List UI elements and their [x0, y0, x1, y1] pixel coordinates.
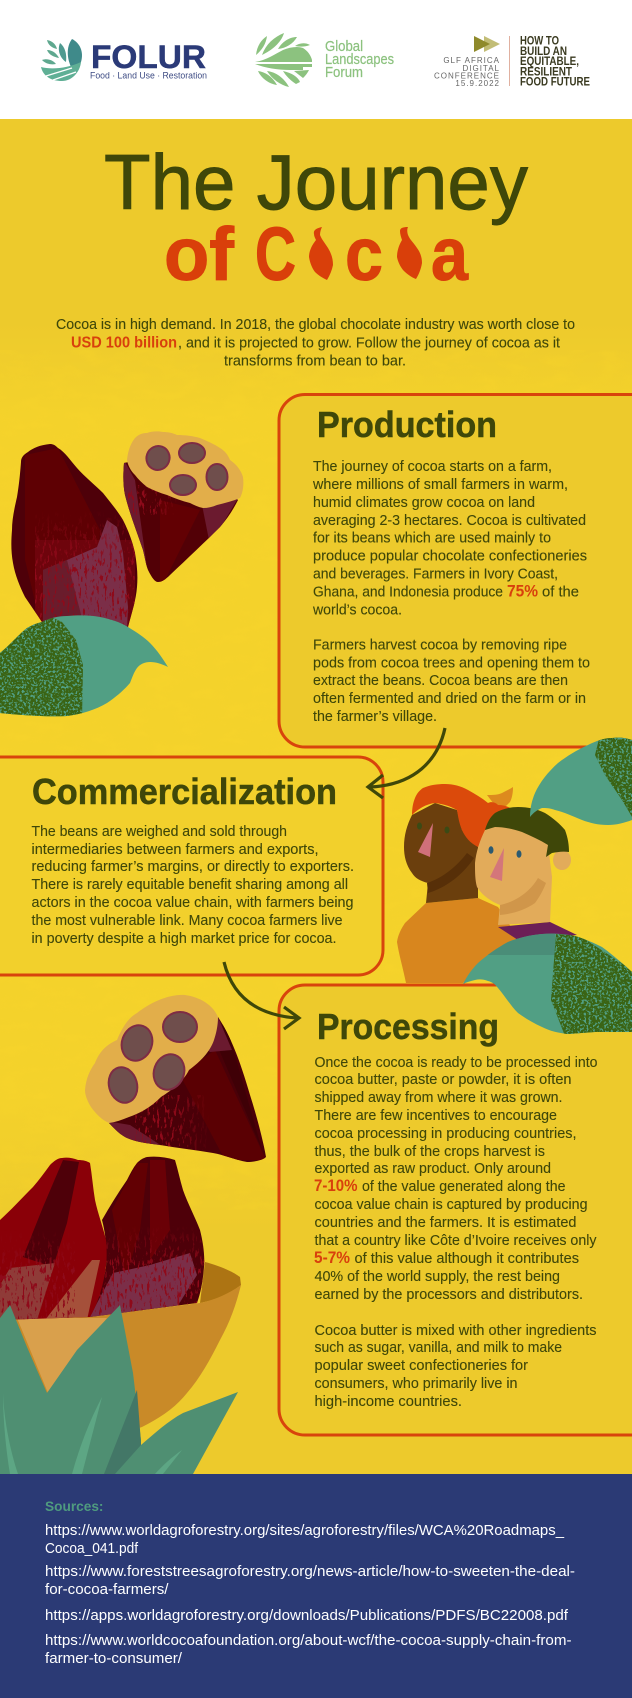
production paragraph 1: The journey of cocoa starts on a farm, — [313, 458, 552, 475]
commercialization text: actors in the cocoa value chain, with farmers being — [32, 894, 354, 911]
panel: production — [279, 394, 632, 747]
illustration: cocoa pods in bowl — [0, 995, 275, 1474]
processing box — [279, 985, 632, 1435]
conference theme: RESILIENT — [520, 66, 572, 78]
processing paragraph 1: cocoa butter, paste or powder, it is often — [314, 1071, 572, 1088]
processing paragraph 1: earned by the processors and distributors. — [314, 1286, 583, 1303]
commercialization text: intermediaries between farmers and exports, — [32, 841, 318, 858]
farmer: woman — [397, 784, 518, 983]
intro text: Cocoa is in high demand. In 2018, the global chocolate industry was worth close to — [56, 316, 575, 333]
production paragraph 1 — [312, 458, 587, 618]
icon: whole cocoa pod — [11, 444, 138, 627]
sources links: for-cocoa-farmers/ — [45, 1581, 169, 1598]
processing paragraph 1: thus, the bulk of the crops harvest is — [314, 1143, 545, 1160]
title line 2 with pod letters — [164, 212, 469, 296]
hair — [485, 807, 569, 857]
sources links: https://apps.worldagroforestry.org/downloads/Publications/PDFS/BC22008.pdf — [45, 1607, 569, 1624]
commercialization text: in poverty despite a high market price for cocoa. — [32, 930, 336, 947]
face and neck — [404, 803, 478, 903]
bowl — [0, 1262, 241, 1474]
icon: green leaf — [0, 615, 168, 716]
processing paragraph 2 — [314, 1322, 596, 1410]
title line 2 with pod letters: a — [431, 212, 469, 296]
processing paragraph 1: that a country like Côte d’Ivoire receives only — [314, 1232, 597, 1249]
conference text: GLF AFRICA — [443, 56, 500, 65]
logo: FOLUR — [41, 39, 207, 81]
intro text — [56, 316, 575, 370]
commercialization text — [32, 823, 354, 947]
plant leaves — [0, 1305, 238, 1474]
shirt — [498, 922, 577, 940]
face and neck — [475, 815, 552, 925]
processing paragraph 2: Cocoa butter is mixed with other ingredients — [314, 1322, 596, 1339]
tagline: Food · Land Use · Restoration — [90, 70, 207, 80]
processing paragraph 1: cocoa value chain is captured by producing — [314, 1196, 588, 1213]
processing paragraph 1: cocoa processing in producing countries, — [314, 1125, 576, 1142]
nose — [490, 848, 504, 881]
pod body — [123, 462, 238, 582]
title line 2 with pod letters: of — [164, 212, 235, 296]
wordmark Global Landscapes Forum: Forum — [325, 65, 363, 81]
processing paragraph 1: shipped away from where it was grown. — [314, 1089, 562, 1106]
production paragraph 1: humid climates grow cocoa on land — [313, 494, 535, 511]
body — [397, 898, 518, 983]
processing paragraph 2: consumers, who primarily live in — [314, 1375, 518, 1392]
commercialization box — [0, 757, 383, 975]
production paragraph 2: Farmers harvest cocoa by removing ripe — [313, 636, 567, 654]
arrow: commercialization to processing — [224, 962, 299, 1029]
processing paragraph 2: popular sweet confectioneries for — [314, 1357, 528, 1374]
icon: GLF landscape — [255, 33, 312, 87]
processing paragraph 2: high-income countries. — [314, 1393, 462, 1410]
wordmark Global Landscapes Forum: Global — [325, 39, 363, 55]
processing paragraph 1: of this value although it contributes — [354, 1250, 579, 1267]
sources links: Cocoa_041.pdf — [45, 1540, 139, 1557]
title line 2 with pod letters: C — [255, 212, 296, 296]
conference text: 15.9.2022 — [455, 79, 500, 88]
processing paragraph 2: such as sugar, vanilla, and milk to make — [314, 1339, 562, 1356]
production paragraph 1: produce popular chocolate confectioneries — [313, 548, 587, 564]
production paragraph 1: 75% — [507, 582, 538, 600]
conference text — [434, 56, 500, 88]
icon: cocoa pod in bowl, left — [0, 1150, 110, 1325]
icon: FOLUR leaf roundel — [41, 39, 82, 81]
production paragraph 1: Ghana, and Indonesia produce — [313, 584, 503, 600]
headwrap — [412, 784, 510, 847]
title — [104, 138, 528, 296]
wordmark Global Landscapes Forum: Landscapes — [325, 52, 394, 68]
icon: lower leaf — [463, 934, 632, 1034]
nose — [418, 823, 433, 857]
processing paragraph 1: of the value generated along the — [362, 1178, 566, 1195]
processing paragraph 1: exported as raw product. Only around — [314, 1160, 551, 1177]
sources links: https://www.foreststreesagroforestry.org/news-article/how-to-sweeten-the-deal- — [45, 1563, 575, 1580]
logo: Global Landscapes Forum — [255, 33, 394, 87]
production paragraph 2: extract the beans. Cocoa beans are then — [313, 672, 568, 689]
beans — [143, 443, 228, 495]
pod body — [109, 1017, 266, 1162]
production paragraph 1: and beverages. Farmers in Ivory Coast, — [313, 566, 558, 582]
commercialization text: There is rarely equitable benefit sharing among all — [32, 876, 348, 893]
conference theme: HOW TO — [520, 36, 559, 48]
icon: play arrows — [474, 36, 500, 52]
headwrap tail — [487, 787, 513, 812]
icon: upper leaf — [525, 735, 632, 827]
production paragraph 1: of the — [542, 584, 579, 600]
production paragraph 2 — [313, 636, 590, 725]
processing paragraph 1 — [314, 1054, 598, 1303]
panel: sources footer — [0, 1474, 632, 1698]
production paragraph 1: for its beans which are used mainly to — [313, 530, 551, 546]
processing paragraph 1: 40% of the world supply, the rest being — [314, 1268, 560, 1285]
cut face of pod — [85, 995, 218, 1123]
conference theme: BUILD AN — [520, 46, 567, 58]
eyes — [488, 846, 522, 858]
eyes — [417, 822, 450, 834]
icon: open cocoa pod — [120, 431, 245, 590]
processing paragraph 1: Once the cocoa is ready to be processed into — [314, 1054, 598, 1071]
illustration: two farmers — [397, 735, 632, 1040]
panel: commercialization — [0, 757, 383, 975]
sources links: https://www.worldagroforestry.org/sites/agroforestry/files/WCA%20Roadmaps_ — [45, 1522, 565, 1539]
conference theme: FOOD FUTURE — [520, 76, 590, 88]
processing paragraph 1: 7-10% — [314, 1177, 358, 1195]
wordmark FOLUR: FOLUR — [91, 39, 206, 75]
production paragraph 2: the farmer’s village. — [313, 708, 437, 725]
processing paragraph 1: There are few incentives to encourage — [314, 1107, 557, 1124]
conference text: DIGITAL — [462, 64, 500, 73]
smile — [500, 878, 546, 915]
processing heading: Processing — [317, 1006, 499, 1047]
intro text: USD 100 billion — [71, 334, 177, 352]
commercialization heading: Commercialization — [32, 771, 337, 812]
smile shadow — [427, 853, 474, 893]
sources heading: Sources: — [45, 1498, 104, 1514]
production paragraph 1: world’s cocoa. — [312, 602, 402, 618]
intro text: transforms from bean to bar. — [224, 352, 406, 370]
logo: GLF Africa conference — [434, 36, 590, 88]
panel: processing — [279, 985, 632, 1435]
conference theme: EQUITABLE, — [520, 56, 579, 68]
ear — [553, 850, 571, 870]
production paragraph 1: averaging 2-3 hectares. Cocoa is cultivated — [313, 512, 586, 529]
sources links: https://www.worldcocoafoundation.org/about-wcf/the-cocoa-supply-chain-from- — [45, 1632, 572, 1649]
production heading: Production — [317, 404, 497, 445]
beans — [105, 1012, 197, 1106]
illustration: cocoa pods and leaf — [0, 431, 245, 720]
intro text: , and it is projected to grow. Follow the journey of cocoa as it — [178, 334, 561, 352]
conference theme — [520, 36, 590, 88]
sources links — [45, 1522, 575, 1667]
production paragraph 2: often fermented and dried on the farm or in — [313, 690, 586, 707]
title line 2 with pod letters: c — [345, 212, 383, 296]
commercialization text: reducing farmer’s margins, or directly to exporters. — [32, 858, 354, 875]
commercialization text: the most vulnerable link. Many cocoa farmers live — [32, 912, 342, 929]
cut face of pod — [127, 431, 243, 508]
processing paragraph 1: 5-7% — [314, 1249, 350, 1267]
wordmark Global Landscapes Forum — [325, 39, 394, 81]
commercialization text: The beans are weighed and sold through — [32, 823, 287, 840]
arrow: production to commercialization — [368, 728, 445, 798]
production box — [279, 394, 632, 747]
sources links: farmer-to-consumer/ — [45, 1650, 183, 1667]
icon: open cocoa pod — [85, 995, 275, 1170]
title line 1: The Journey — [104, 138, 528, 226]
farmer: man — [475, 807, 577, 940]
processing paragraph 1: countries and the farmers. It is estimated — [314, 1214, 576, 1231]
production paragraph 2: pods from cocoa trees and opening them to — [313, 654, 590, 672]
icon: cocoa pod in bowl, right — [90, 1156, 204, 1317]
conference text: CONFERENCE — [434, 72, 500, 80]
production paragraph 1: where millions of small farmers in warm, — [312, 476, 568, 493]
